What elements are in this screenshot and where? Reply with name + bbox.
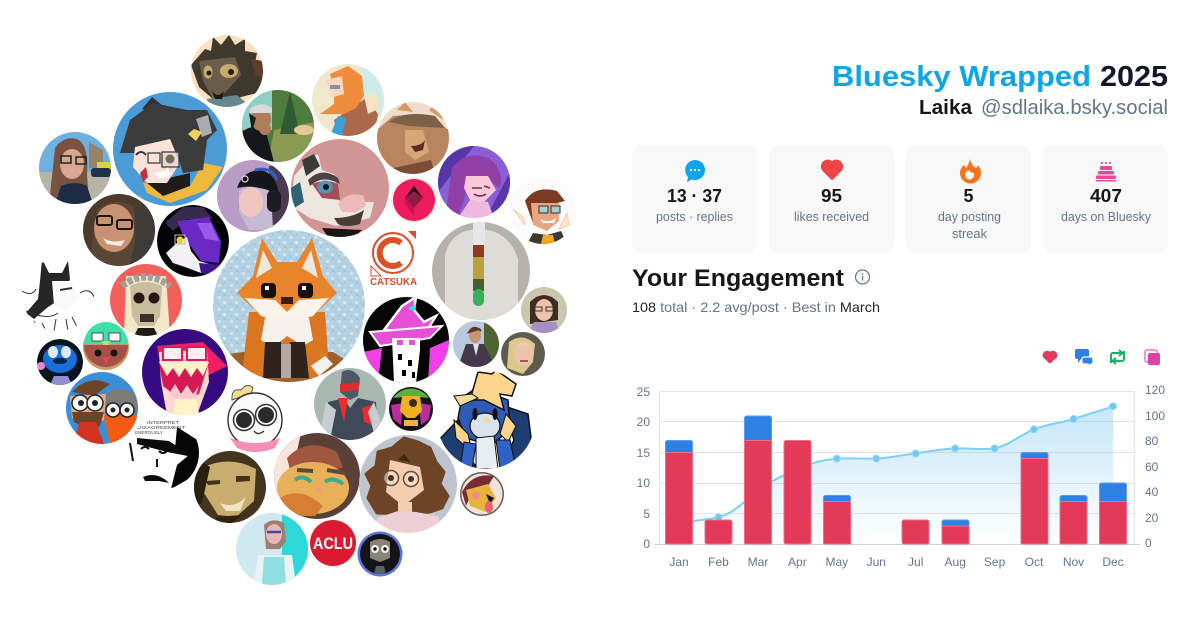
month labels: Dec bbox=[1102, 555, 1124, 569]
right axis labels: 0 bbox=[1145, 536, 1152, 550]
avatar: pink wizard bbox=[363, 297, 449, 383]
avatar: woman with bangs bbox=[521, 287, 567, 333]
avatar cloud bbox=[22, 35, 579, 585]
avatar: clay figure bbox=[274, 433, 360, 519]
icon: legend quotes bbox=[1145, 350, 1160, 365]
avatar: ink sketch cat girl bbox=[22, 259, 94, 331]
avatar: black and white comic bbox=[127, 417, 199, 489]
left axis labels: 5 bbox=[643, 507, 650, 521]
avatar: pink gem logo bbox=[391, 177, 437, 223]
avatar: dark figure with googly eyes bbox=[358, 532, 402, 576]
avatar: black and white comic: ENEROUSLY bbox=[135, 430, 163, 435]
stat card: days on Bluesky: days on Bluesky bbox=[1061, 210, 1152, 224]
stat card: streak: streak bbox=[952, 227, 988, 241]
month labels: Feb bbox=[708, 555, 729, 569]
stat card: likes bbox=[769, 145, 894, 253]
left axis labels: 15 bbox=[637, 446, 650, 460]
avatar: brown wolf bbox=[191, 35, 263, 111]
month labels: Sep bbox=[984, 555, 1006, 569]
reply bars bbox=[666, 416, 1126, 528]
avatar: blue dragon bbox=[437, 370, 535, 469]
avatar: Catsuka logo: CATSUKA bbox=[370, 277, 417, 288]
avatar: ACLU logo: ACLU bbox=[313, 534, 353, 553]
month labels: Jan bbox=[669, 555, 689, 569]
month labels: Jul bbox=[908, 555, 923, 569]
stat card: days on Bluesky: 407 bbox=[1090, 186, 1122, 206]
icon: flame bbox=[960, 159, 981, 184]
stat card: streak: 5 bbox=[964, 186, 974, 206]
avatar: two bearded cartoon men bbox=[66, 372, 138, 444]
stat card: likes: likes received bbox=[794, 210, 869, 224]
avatar: brown hat bbox=[377, 102, 449, 174]
right axis labels: 100 bbox=[1145, 409, 1165, 423]
avatar: pink furry bbox=[291, 139, 389, 237]
avatar: man in suit bbox=[453, 321, 499, 367]
avatar: purple hair bbox=[438, 146, 510, 218]
month labels: May bbox=[825, 555, 848, 569]
heading: your engagement: Your Engagement bbox=[632, 265, 844, 292]
avatar: green and red faces bbox=[83, 322, 129, 370]
left axis labels bbox=[637, 385, 650, 551]
stat card: likes: 95 bbox=[821, 186, 842, 206]
avatar: blue robot bbox=[37, 339, 83, 385]
avatar: woman in teal light bbox=[236, 513, 308, 585]
icon: legend heart bbox=[1043, 351, 1057, 363]
icon: info bbox=[856, 270, 870, 284]
right axis labels: 60 bbox=[1145, 460, 1159, 474]
avatar: laughing pink character bbox=[142, 329, 228, 415]
month labels bbox=[669, 555, 1124, 569]
icon: cake bbox=[1096, 162, 1116, 182]
avatar: orange hair bbox=[312, 64, 384, 136]
month labels: Mar bbox=[748, 555, 768, 569]
icon: speech bubble bbox=[685, 160, 705, 182]
month labels: Nov bbox=[1063, 555, 1084, 569]
month labels: Aug bbox=[945, 555, 966, 569]
avatar: white round mascot bbox=[228, 385, 282, 452]
right axis labels: 80 bbox=[1145, 434, 1159, 448]
left axis labels: 0 bbox=[643, 537, 650, 551]
avatar: pixel fox bbox=[213, 230, 365, 382]
avatar: purple wolf bbox=[157, 205, 229, 277]
stat card: streak bbox=[906, 145, 1031, 253]
like bars bbox=[666, 440, 1126, 544]
avatar: blonde with headset bbox=[217, 160, 289, 232]
avatar: woman with long hair bbox=[39, 132, 111, 204]
stat card: streak: day posting bbox=[938, 210, 1001, 224]
engagement chart bbox=[637, 383, 1165, 569]
title: 2025 bbox=[1100, 61, 1168, 93]
profile name and handle: Laika bbox=[919, 97, 973, 119]
avatar: man with cows bbox=[242, 90, 314, 162]
left axis labels: 25 bbox=[637, 385, 650, 399]
stat card: posts and replies: posts · replies bbox=[656, 210, 733, 224]
title: Bluesky Wrapped bbox=[832, 61, 1091, 93]
right axis labels: 120 bbox=[1145, 383, 1165, 397]
right axis labels bbox=[1145, 383, 1165, 550]
cumulative area and line bbox=[679, 403, 1116, 544]
avatar: bear with tongue bbox=[460, 472, 504, 516]
chart legend icons bbox=[1043, 349, 1160, 366]
avatar: gold trophy bbox=[389, 387, 433, 431]
stat card: posts and replies bbox=[632, 145, 757, 253]
avatar: smiling woman with glasses bbox=[83, 194, 155, 266]
left axis labels: 20 bbox=[637, 415, 650, 429]
left axis labels: 10 bbox=[637, 476, 650, 490]
engagement summary: 108 total · 2.2 avg/post · Best in March bbox=[632, 299, 880, 315]
title bbox=[832, 61, 1168, 119]
month labels: Jun bbox=[867, 555, 886, 569]
icon: heart bbox=[822, 161, 842, 179]
avatar: ACLU logo bbox=[310, 520, 356, 566]
avatar: Catsuka logo bbox=[370, 231, 417, 288]
avatar: armored hero bbox=[314, 368, 386, 440]
right axis labels: 40 bbox=[1145, 485, 1159, 499]
avatar: black and white comic: DISAGREEMENT bbox=[137, 425, 185, 430]
avatar: curly haired girl bbox=[359, 435, 457, 533]
stat card: days on Bluesky bbox=[1043, 145, 1168, 253]
stat card: posts and replies: 13 · 37 bbox=[667, 186, 722, 206]
month labels: Apr bbox=[788, 555, 807, 569]
avatar: black-haired anime girl bbox=[113, 92, 227, 206]
avatar: boy with glasses bbox=[512, 189, 570, 244]
avatar: black and white comic: INTERPRET bbox=[147, 420, 179, 425]
month labels: Oct bbox=[1025, 555, 1044, 569]
icon: legend reposts bbox=[1111, 350, 1124, 364]
icon: legend replies bbox=[1075, 349, 1093, 366]
profile name and handle: @sdlaika.bsky.social bbox=[981, 97, 1168, 119]
avatar: test tube bbox=[432, 222, 530, 320]
avatar: sepia bearded man bbox=[194, 451, 266, 523]
avatar: skeleton with flower crown bbox=[110, 264, 182, 336]
avatar: blonde woman bbox=[501, 332, 545, 376]
right axis labels: 20 bbox=[1145, 511, 1159, 525]
